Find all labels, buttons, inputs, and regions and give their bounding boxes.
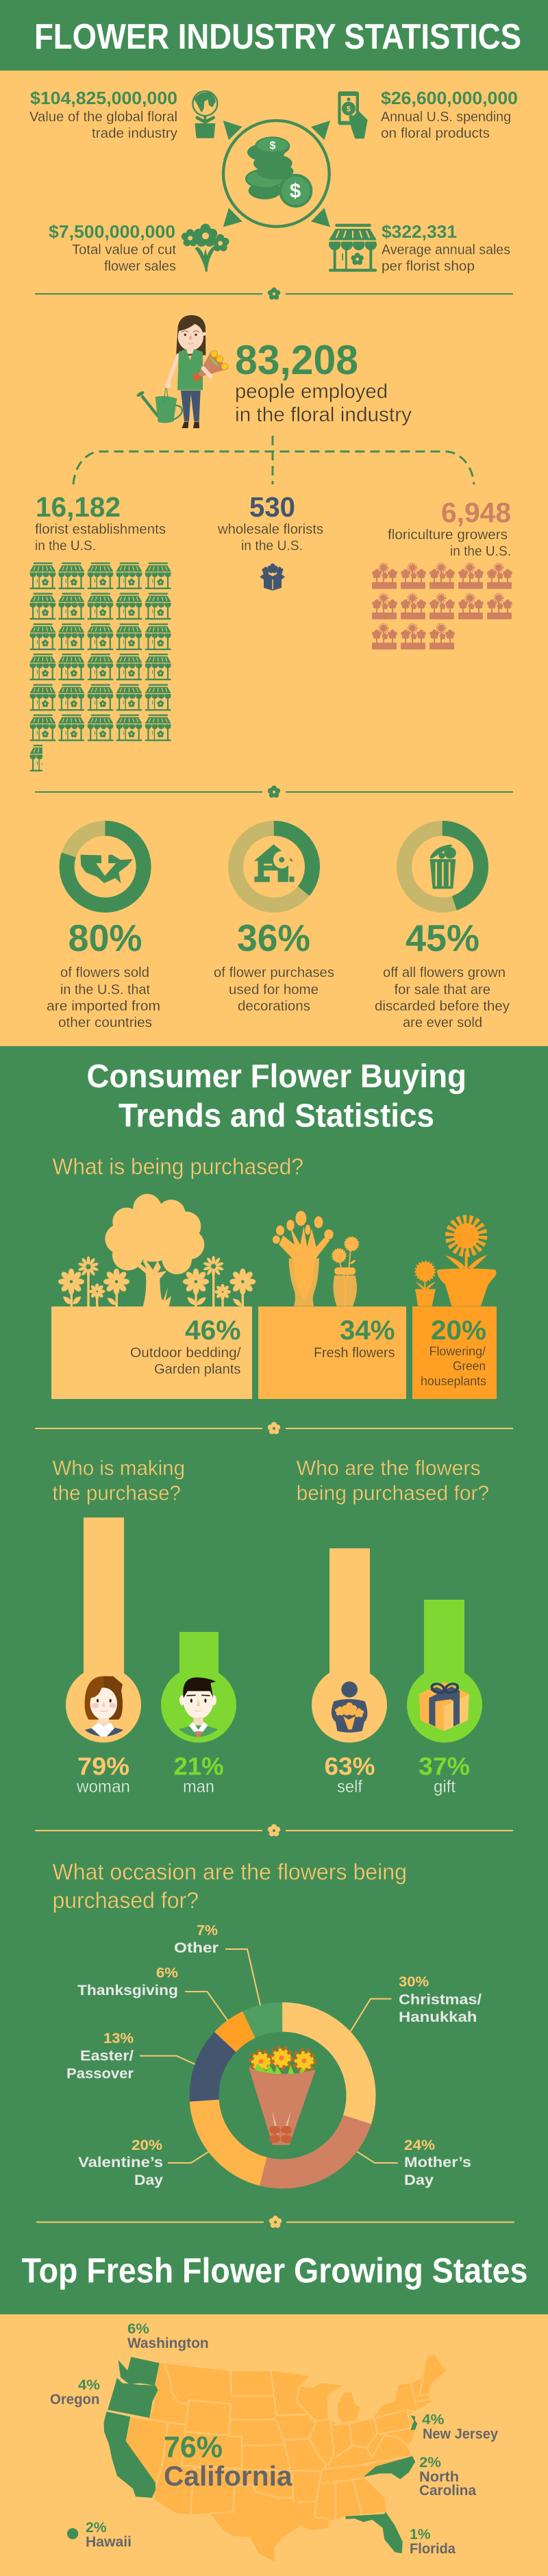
arrows pointing to center (223, 121, 330, 227)
subheading: Who are the flowers (297, 1456, 481, 1480)
state: hawaii (67, 2528, 78, 2539)
stat: sales per florist shop: $322,331 (382, 221, 457, 242)
stat: global floral trade (29, 88, 177, 141)
donut: 36 percent home decoration: 36% (237, 917, 310, 959)
bar: outdoor garden plants: Outdoor bedding/ (130, 1346, 241, 1361)
stat: annual US spending (381, 88, 518, 141)
icon: coin stack: $ (270, 140, 276, 151)
divider: flower (35, 1824, 513, 1836)
icon: man face (179, 1677, 218, 1737)
illustration: tree and garden flowers (58, 1194, 256, 1307)
label: christmas hanukkah: 30% (399, 1974, 429, 1990)
label: north carolina: 2% (419, 2455, 441, 2470)
donut: 45 percent discarded: off all flowers grown (383, 965, 506, 980)
panel: occasions (52, 1859, 482, 2188)
label: mothers day: 24% (404, 2138, 435, 2153)
subheading: What is being purchased? (52, 1154, 303, 1179)
bar: houseplants: 20% (431, 1315, 486, 1346)
bar: man: 21% (174, 1753, 223, 1780)
icon: coin stack: $ (290, 179, 301, 202)
bar: self (312, 1548, 387, 1796)
stat: cut flower sales: $7,500,000,000 (49, 221, 175, 242)
divider: flower (35, 1422, 513, 1434)
label: florida: 1% (410, 2527, 431, 2542)
icon: house with flower (254, 844, 295, 882)
bar: houseplants (412, 1306, 497, 1399)
label: easter passover: Passover (66, 2066, 134, 2082)
subheading (297, 1456, 489, 1504)
stat: sales per florist shop (382, 221, 510, 274)
stat: floriculture growers: floriculture growers (388, 528, 508, 543)
label: thanksgiving (77, 1965, 178, 1998)
icon: globe plant (192, 91, 217, 138)
label: thanksgiving: 6% (156, 1965, 178, 1981)
icon: hand holding bill (338, 91, 368, 138)
bar: man (161, 1632, 236, 1796)
label: washington (127, 2321, 209, 2351)
green consumer section background (0, 1046, 548, 2314)
label: hawaii: 2% (86, 2520, 107, 2536)
donut: 45 percent discarded: discarded before they (375, 999, 510, 1014)
panel: percentage donuts (47, 828, 510, 1030)
stat: wholesale florists: wholesale florists (217, 522, 323, 537)
icon: flower box (260, 563, 285, 591)
illustration: woman with flowers and watering can (136, 315, 228, 428)
state: north carolina (364, 2456, 415, 2479)
stat: florist establishments (35, 491, 166, 554)
label: california (164, 2431, 293, 2492)
bar: gift (407, 1600, 482, 1796)
stat: people employed: 83,208 (235, 337, 358, 383)
ring around coins (223, 121, 329, 227)
panel: employment (29, 315, 512, 771)
bar: woman: 79% (77, 1753, 129, 1780)
bar: houseplants: Green (453, 1359, 486, 1373)
stat: wholesale florists (217, 491, 323, 554)
bar: fresh flowers (258, 1306, 406, 1399)
divider: flower (36, 2216, 514, 2228)
divider: flower (35, 288, 513, 299)
icon: trash can with flowers (430, 845, 456, 889)
label: north carolina (419, 2455, 476, 2499)
map: top growing states (50, 2321, 498, 2562)
heading: consumer trends (86, 1058, 466, 1135)
label: mothers day: Day (404, 2172, 434, 2188)
label: other: Other (174, 1940, 219, 1956)
label: california: California (164, 2460, 293, 2492)
leader lines (140, 1949, 398, 2163)
label: new jersey: New Jersey (423, 2427, 498, 2442)
donut chart: occasions (204, 2017, 361, 2174)
bar: self: self (337, 1777, 362, 1796)
panel: who is making the purchase (52, 1456, 236, 1796)
label: oregon (50, 2377, 100, 2407)
state: new jersey (410, 2416, 417, 2430)
pictogram: growers (372, 563, 512, 649)
map shapes (67, 2355, 446, 2562)
label: christmas hanukkah: Hanukkah (399, 2009, 477, 2025)
label: thanksgiving: Thanksgiving (77, 1983, 178, 1998)
illustration: potted plants (415, 1219, 496, 1306)
stat: sales per florist shop: Average annual sales (382, 243, 510, 258)
heading: consumer trends: Consumer Flower Buying (86, 1058, 466, 1095)
stat: people employed: in the floral industry (235, 404, 412, 426)
icon: person with bouquet (332, 1681, 367, 1733)
panel: who are the flowers for (297, 1456, 489, 1796)
stat: annual US spending: $26,600,000,000 (381, 88, 518, 108)
bar: outdoor garden plants: 46% (185, 1315, 241, 1346)
label: new jersey (422, 2412, 498, 2442)
donut: 80 percent imported: other countries (58, 1015, 152, 1030)
stat: global floral trade: Value of the global floral (29, 110, 177, 125)
label: easter passover (66, 2031, 134, 2082)
state borders (131, 2364, 432, 2521)
bar: gift: gift (434, 1777, 456, 1796)
donut: 36 percent home decoration: decorations (238, 999, 310, 1014)
stat: wholesale florists: in the U.S. (241, 538, 303, 554)
bar: outdoor garden plants: Garden plants (154, 1362, 241, 1377)
label: hawaii (86, 2520, 132, 2550)
stat: people employed (235, 337, 412, 426)
stat: sales per florist shop: per florist shop (382, 259, 475, 274)
state: florida (345, 2512, 403, 2553)
label: north carolina: North (419, 2469, 459, 2485)
stat: florist establishments: in the U.S. (35, 538, 96, 554)
bar: woman (66, 1518, 141, 1796)
bar: fresh flowers: Fresh flowers (314, 1346, 395, 1361)
donut: 45 percent discarded (375, 828, 510, 1030)
panel: money stats (29, 88, 518, 274)
label: valentines day (78, 2138, 163, 2188)
subheading (52, 1859, 407, 1913)
state: washington (118, 2357, 160, 2386)
donut: 80 percent imported: 80% (68, 917, 142, 959)
label: florida: Florida (410, 2541, 456, 2557)
label: north carolina: Carolina (419, 2483, 476, 2499)
donut: 45 percent discarded: for sale that are (395, 982, 490, 998)
bar: man: man (183, 1777, 214, 1796)
divider: flower (35, 785, 513, 797)
stat: cut flower sales: flower sales (104, 259, 176, 274)
donut: 36 percent home decoration: used for home (229, 982, 319, 998)
icon: woman face (85, 1676, 123, 1737)
label: easter passover: Easter/ (80, 2048, 134, 2064)
label: new jersey: 4% (422, 2412, 445, 2427)
label: mothers day: Mother’s (404, 2155, 471, 2170)
icon: hand holding bill: $ (347, 105, 351, 113)
label: valentines day: 20% (132, 2138, 162, 2153)
bar: gift: 37% (419, 1753, 470, 1780)
label: mothers day (404, 2138, 471, 2188)
stat: florist establishments: florist establishments (35, 522, 166, 537)
pictogram: florist shops (29, 562, 171, 771)
stat: floriculture growers: 6,948 (441, 497, 511, 528)
stat: cut flower sales: Total value of cut (72, 243, 176, 258)
label: valentines day: Day (134, 2172, 163, 2188)
bar: fresh flowers: 34% (340, 1315, 395, 1346)
state: california (104, 2412, 155, 2498)
label: washington: 6% (127, 2321, 149, 2337)
label: other: 7% (197, 1923, 218, 1939)
dashed connector (73, 436, 474, 484)
label: washington: Washington (127, 2336, 209, 2351)
label: hawaii: Hawaii (86, 2534, 132, 2550)
donut: 80 percent imported: are imported from (47, 999, 160, 1014)
label: oregon: Oregon (50, 2392, 99, 2407)
subheading: Who is making (52, 1456, 185, 1480)
donut: 80 percent imported: of flowers sold (60, 965, 149, 980)
michigan (337, 2392, 360, 2423)
subheading: What occasion are the flowers being (52, 1859, 407, 1885)
stat: global floral trade: $104,825,000,000 (30, 88, 177, 108)
bar: outdoor garden plants (51, 1306, 252, 1399)
icon: US map with arrow (80, 854, 133, 883)
stat: annual US spending: Annual U.S. spending (381, 110, 511, 125)
icons and central coin ring (182, 91, 377, 272)
label: christmas hanukkah: Christmas/ (399, 1992, 482, 2008)
donut: 80 percent imported: in the U.S. that (60, 982, 150, 998)
bar: houseplants: houseplants (421, 1374, 486, 1388)
stat: floriculture growers (388, 497, 511, 559)
stat: floriculture growers: in the U.S. (450, 544, 511, 559)
state: oregon (108, 2378, 158, 2418)
donut: 36 percent home decoration: of flower purchases (214, 965, 334, 980)
label: oregon: 4% (78, 2377, 100, 2393)
stat: people employed: people employed (235, 380, 388, 403)
label: california: 76% (164, 2431, 223, 2464)
illustration: bouquet in cone (249, 2049, 316, 2145)
label: easter passover: 13% (103, 2031, 134, 2046)
label: other (174, 1923, 219, 1956)
stat: cut flower sales (49, 221, 176, 274)
label: florida (410, 2527, 456, 2557)
yellow map section background (0, 2314, 548, 2576)
icon: florist shop (329, 224, 377, 272)
stat: global floral trade: trade industry (92, 126, 177, 141)
illustration: fresh flowers in vases (273, 1211, 358, 1306)
icon: gift box (419, 1682, 469, 1731)
donut: 45 percent discarded: are ever sold (403, 1015, 482, 1030)
bar: woman: woman (76, 1777, 130, 1796)
contiguous states (126, 2355, 446, 2562)
heading: consumer trends: Trends and Statistics (119, 1098, 434, 1135)
stat: florist establishments: 16,182 (36, 491, 121, 523)
label: valentines day: Valentine’s (78, 2155, 163, 2170)
subheading: being purchased for? (297, 1481, 489, 1504)
header band: flower industry statistics (0, 0, 548, 71)
donut: 36 percent home decoration (214, 828, 334, 1014)
icon: bouquet (182, 224, 229, 272)
donut: 45 percent discarded: 45% (406, 917, 480, 959)
panel: what is being purchased (51, 1154, 497, 1399)
subheading: purchased for? (52, 1887, 199, 1913)
bar: self: 63% (325, 1753, 375, 1780)
icon: coin stack (246, 136, 312, 208)
label: christmas hanukkah (399, 1974, 482, 2025)
stat: wholesale florists: 530 (249, 491, 295, 523)
donut: 80 percent imported (47, 828, 160, 1030)
subheading: the purchase? (52, 1481, 181, 1504)
bar: houseplants: Flowering/ (429, 1344, 486, 1358)
subheading (52, 1456, 185, 1504)
stat: annual US spending: on floral products (381, 126, 490, 141)
